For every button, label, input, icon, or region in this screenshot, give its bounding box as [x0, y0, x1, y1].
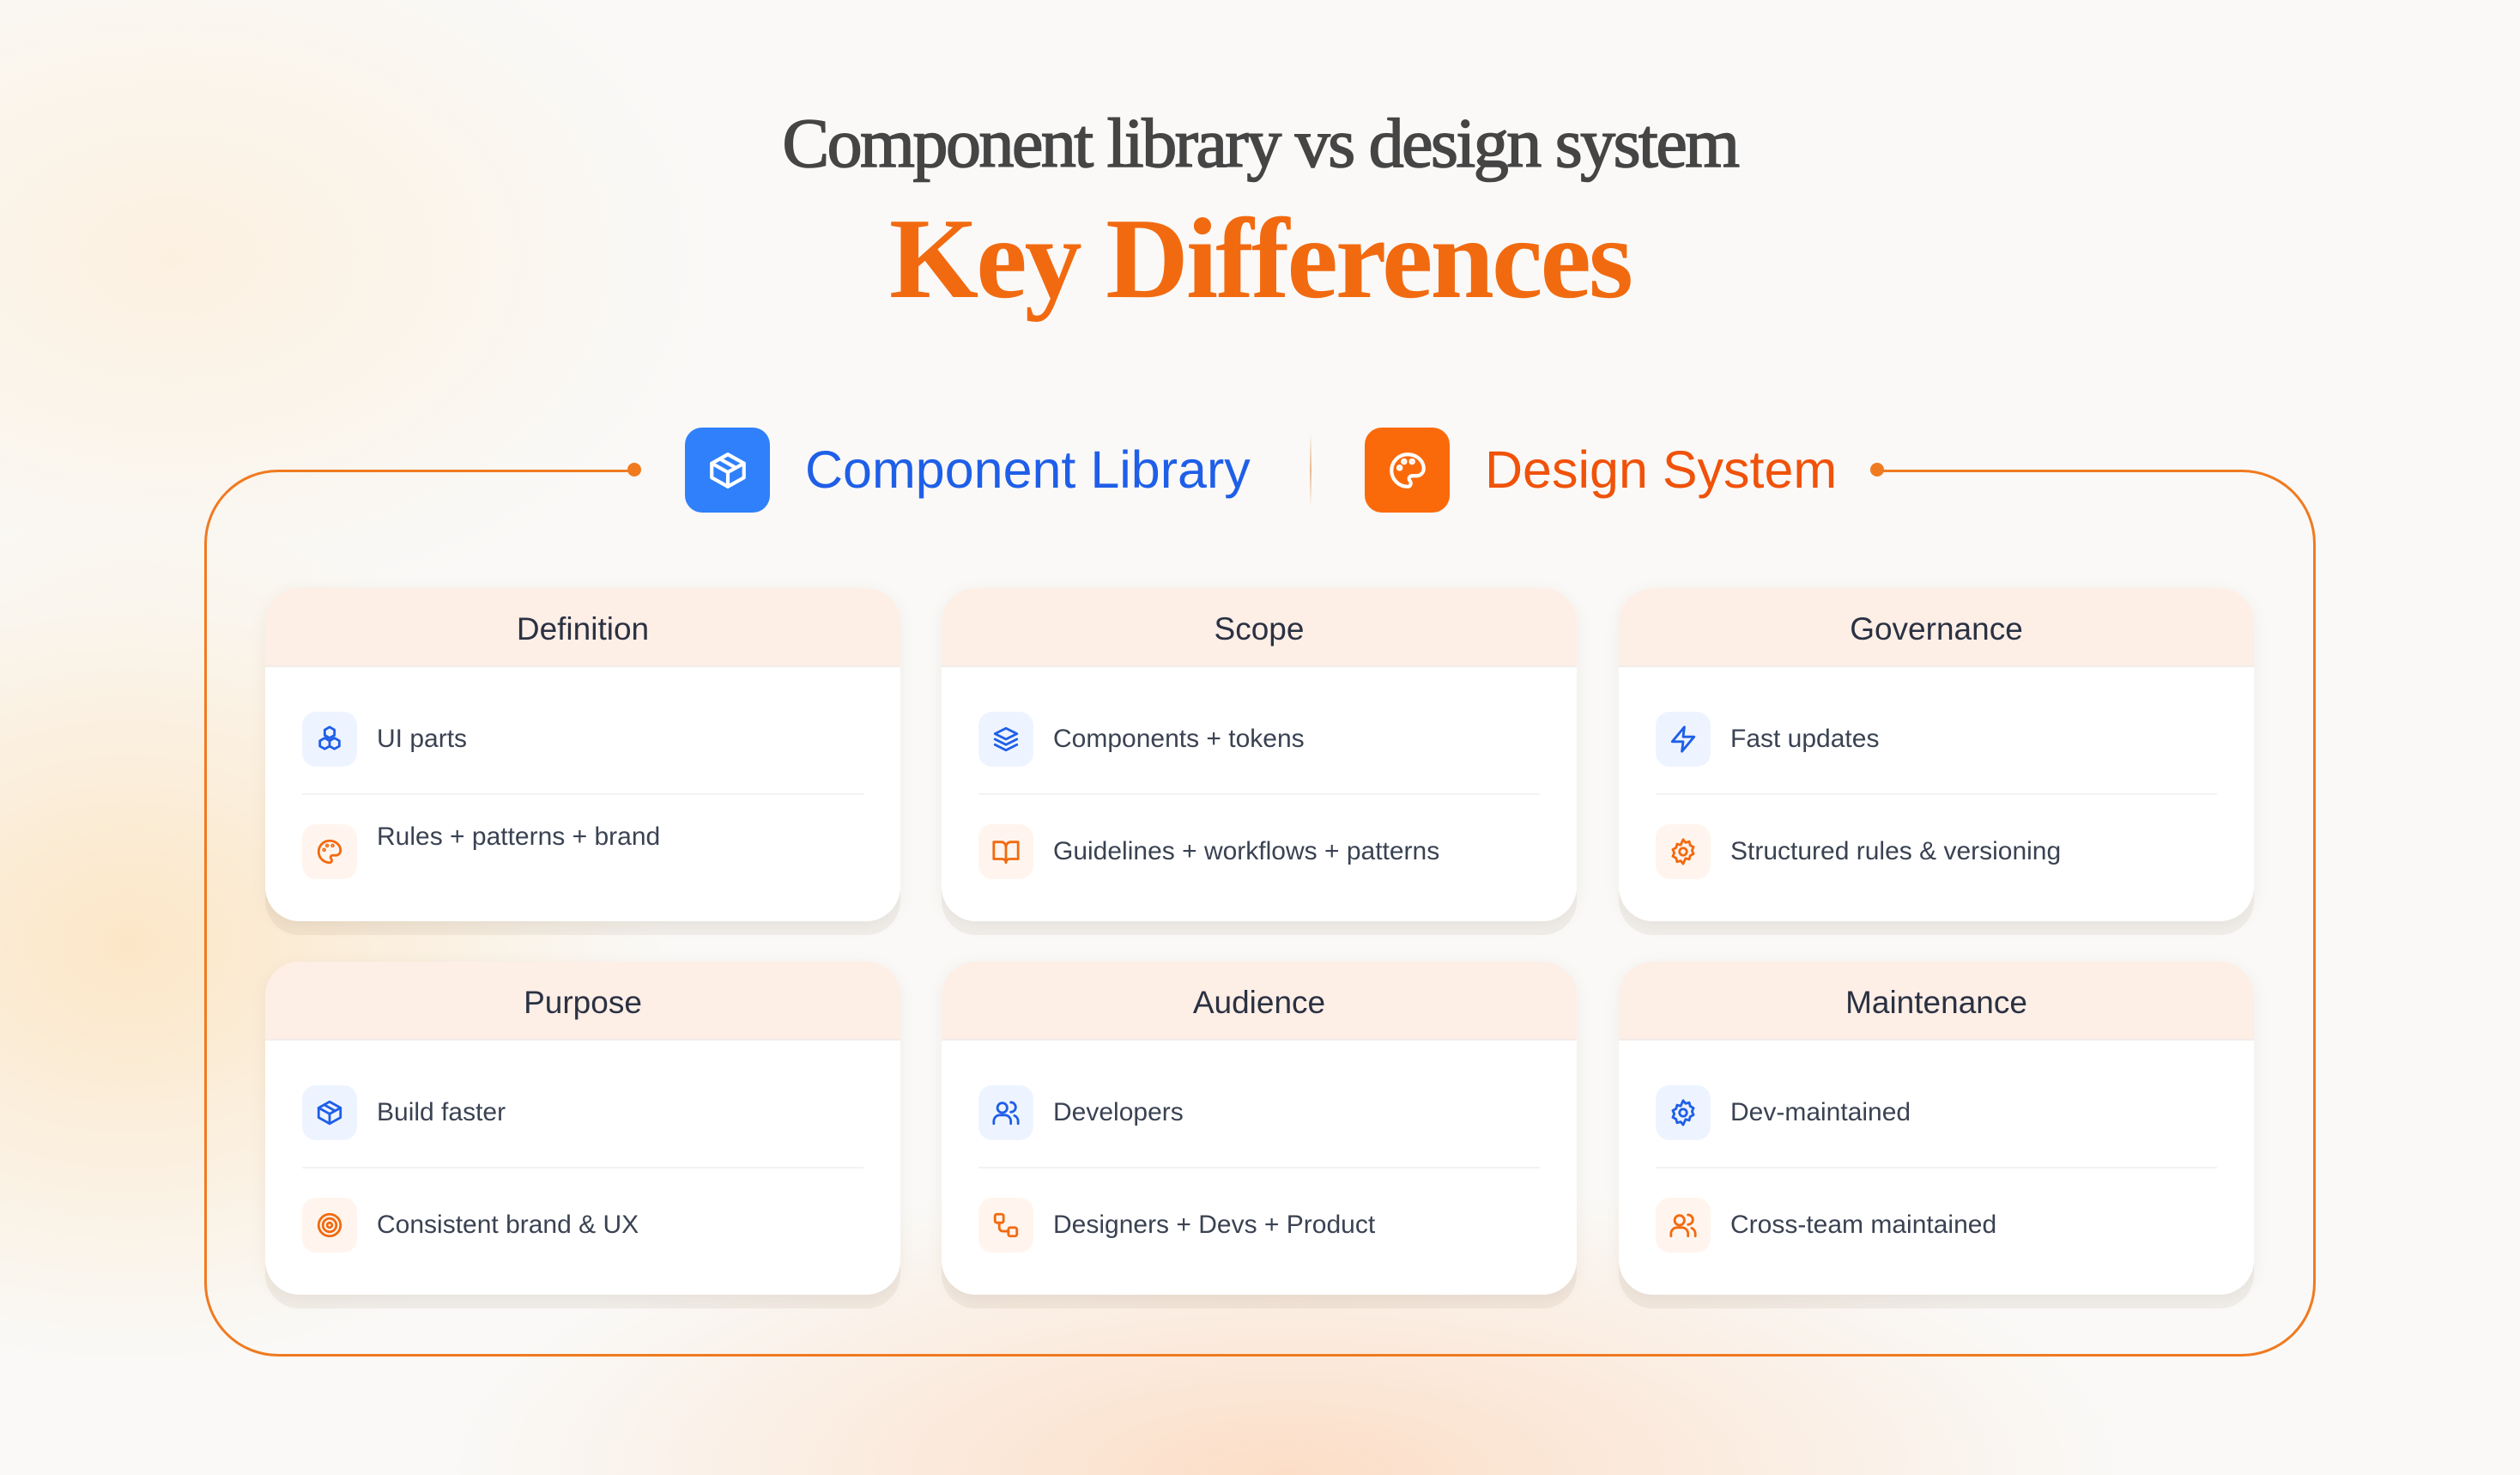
item: Components + tokens: Components + tokens [1053, 725, 1305, 753]
card: Definition: Definition [517, 611, 649, 646]
item: Guidelines [978, 824, 1439, 879]
item: Dev-maintained: Dev-maintained [1730, 1098, 1911, 1126]
item: Fast updates [1656, 712, 1879, 767]
icon: box [685, 428, 770, 513]
legend: Component Library: Component Library [805, 440, 1251, 499]
frame [204, 470, 2316, 1357]
item: Build faster: Build faster [377, 1098, 506, 1126]
item: Components + tokens [978, 712, 1305, 767]
item: Guidelines: Guidelines + workflows + patterns [1053, 837, 1439, 865]
item: Designers [978, 1198, 1375, 1253]
card: Audience [942, 962, 1577, 1295]
icon: palette [1365, 428, 1450, 513]
legend: Design System [1365, 428, 1837, 513]
item: Structured rules: Structured rules & versioning [1730, 837, 2061, 865]
card: Scope [942, 588, 1577, 921]
item: Dev-maintained [1656, 1085, 1911, 1140]
item: Build faster [302, 1085, 506, 1140]
card: Governance [1619, 588, 2254, 921]
card: Maintenance [1619, 962, 2254, 1295]
item: Consistent brand [302, 1198, 639, 1253]
item: Rules + patterns + brand: Rules + patterns + brand [377, 822, 660, 851]
item: Developers: Developers [1053, 1098, 1184, 1126]
legend: Design System: Design System [1485, 440, 1837, 499]
card: Purpose [265, 962, 900, 1295]
dot right [1870, 463, 1884, 476]
item: Cross-team [1656, 1198, 1996, 1253]
item: Consistent brand: Consistent brand & UX [377, 1211, 639, 1239]
card: Audience: Audience [1193, 985, 1325, 1020]
card: Definition [265, 588, 900, 921]
item: UI parts: UI parts [377, 725, 467, 753]
card: Governance: Governance [1850, 611, 2023, 646]
legend: Component Library [685, 428, 1251, 513]
item: Cross-team: Cross-team maintained [1730, 1211, 1996, 1239]
dot left [627, 463, 641, 476]
card: Scope: Scope [1215, 611, 1304, 646]
subtitle: Key Differences: Key Differences [889, 195, 1631, 322]
item: Designers: Designers + Devs + Product [1053, 1211, 1375, 1239]
card: Maintenance: Maintenance [1845, 985, 2027, 1020]
title: Component library vs design system [782, 104, 1737, 182]
item: Structured rules [1656, 824, 2061, 879]
item: Rules + patterns + brand [302, 822, 660, 879]
divider vertical [1310, 434, 1311, 507]
card: Purpose: Purpose [524, 985, 642, 1020]
item: Developers [978, 1085, 1184, 1140]
item: UI parts [302, 712, 467, 767]
item: Fast updates: Fast updates [1730, 725, 1879, 753]
